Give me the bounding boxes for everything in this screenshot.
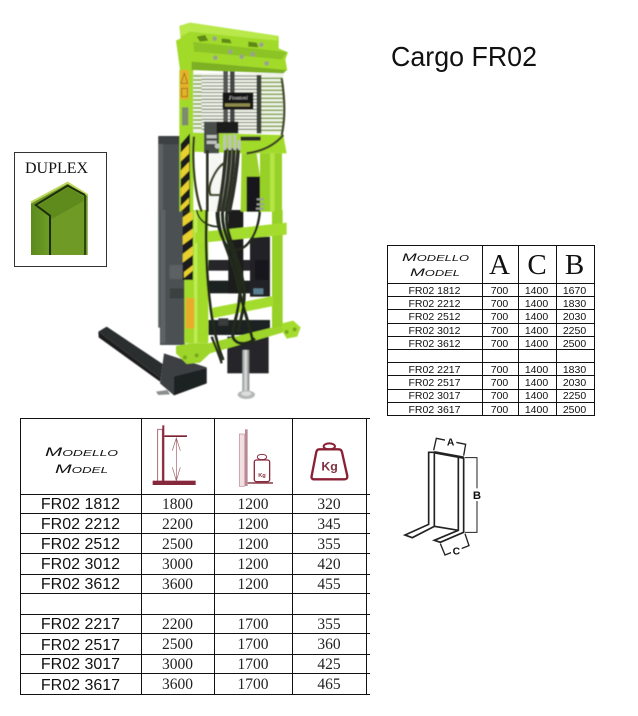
capacities values: 1200	[238, 516, 269, 533]
capacities values: 1200	[238, 576, 269, 593]
capacities model column: FR02 3617	[41, 677, 120, 694]
capacities table header: Model	[55, 462, 108, 476]
dimensions table rows: FR02 2517	[409, 377, 461, 389]
warning sticker lower	[186, 298, 194, 329]
capacities values: 320	[317, 496, 341, 513]
icon: lift height	[153, 425, 196, 485]
upper machine parts	[176, 23, 288, 212]
dimensions table rows: FR02 2217	[409, 364, 461, 376]
capacities values: 1700	[238, 656, 269, 673]
dimensions table rows: 700	[491, 298, 508, 310]
lower green uprights	[260, 153, 282, 212]
dimensions table rows: 700	[491, 404, 508, 416]
duplex label: DUPLEX	[25, 160, 89, 177]
dimensions table header: B	[565, 249, 584, 281]
diagram: fork dimensions A B C: B	[473, 490, 481, 502]
capacities model column: FR02 2512	[41, 536, 120, 553]
capacities model column: FR02 2217	[41, 616, 120, 633]
capacities values: 3600	[162, 676, 193, 693]
dimensions table rows: 2500	[563, 404, 586, 416]
dimension label B	[472, 488, 482, 501]
dimensions table rows: FR02 2512	[409, 311, 461, 323]
icon: weight: Kg	[321, 460, 338, 474]
dark rear mast upper	[158, 136, 182, 328]
dimensions table rows: FR02 3612	[409, 338, 461, 350]
top carriage	[176, 23, 288, 71]
capacities values: 1200	[238, 556, 269, 573]
dimensions table rows: 1400	[525, 377, 548, 389]
capacities table header: Modello	[45, 445, 118, 459]
dimensions table rows: 2030	[563, 377, 586, 389]
dimension label A	[445, 436, 456, 447]
dimensions table header: C	[527, 249, 547, 281]
dimensions table rows: 2250	[563, 325, 586, 337]
illustration: green mast lift	[98, 23, 301, 399]
dimensions table rows: 2250	[563, 390, 586, 402]
icon: load capacity	[239, 429, 273, 486]
dimensions table rows: 1830	[563, 364, 586, 376]
dimensions table rows: 1400	[525, 311, 548, 323]
valve block	[204, 122, 219, 153]
dimensions table rows: FR02 3617	[409, 404, 461, 416]
icon: green channel profile	[31, 183, 88, 255]
capacities values: 3600	[162, 576, 193, 593]
capacities values: 1200	[238, 496, 269, 513]
capacities values: 360	[317, 636, 341, 653]
dimensions table rows: 2500	[563, 338, 586, 350]
capacities values: 3000	[162, 656, 193, 673]
capacities values: 3000	[162, 556, 193, 573]
dimensions table rows: 1400	[525, 338, 548, 350]
hazard stripes lower	[183, 210, 193, 280]
dimensions table rows: 1400	[525, 364, 548, 376]
capacities values: 420	[317, 556, 341, 573]
dimensions table rows: 1400	[525, 298, 548, 310]
capacities model column: FR02 2517	[41, 637, 120, 654]
dimensions table rows: 1830	[563, 298, 586, 310]
jack stand	[242, 350, 249, 392]
capacities model column: FR02 3012	[41, 556, 120, 573]
capacities model column: FR02 3017	[41, 656, 120, 673]
title: Cargo FR02	[391, 41, 537, 72]
dimensions table rows: FR02 2212	[409, 298, 461, 310]
duplex frame	[14, 152, 106, 266]
capacities values: 2500	[162, 536, 193, 553]
wire guard	[193, 73, 283, 133]
dimensions table rows: 1400	[525, 390, 548, 402]
dimensions table rows: 2030	[563, 311, 586, 323]
capacities values: 1700	[238, 616, 269, 633]
orange warning stickers	[180, 70, 189, 99]
dimensions table header	[402, 249, 584, 281]
dimensions table rows: 700	[491, 364, 508, 376]
dimensions table rows: 1400	[525, 285, 548, 297]
capacities values	[162, 496, 341, 693]
diagram: fork dimensions A B C: C	[453, 546, 461, 557]
fork	[98, 327, 163, 378]
capacities values: 2200	[162, 516, 193, 533]
capacities values: 355	[317, 536, 341, 553]
panel: duplex profile	[14, 152, 106, 266]
capacities values: 345	[317, 516, 341, 533]
panel brand text: Frontoni	[228, 95, 248, 101]
table: dimensions A C B	[387, 245, 594, 416]
capacities values: 1700	[238, 636, 269, 653]
dimensions table rows: 1670	[563, 285, 586, 297]
capacities values: 2200	[162, 616, 193, 633]
dimensions table header: A	[489, 249, 510, 281]
capacities table header	[45, 445, 118, 476]
icon: load capacity: Kg	[258, 473, 266, 479]
hoses lower	[197, 210, 260, 363]
capacities values: 465	[317, 676, 341, 693]
capacities values: 1800	[162, 496, 193, 513]
dimensions table header: Model	[410, 267, 460, 279]
capacities values: 1700	[238, 676, 269, 693]
grey plate	[182, 107, 188, 125]
dimensions table rows: 700	[491, 377, 508, 389]
black control panel	[223, 93, 253, 109]
dimensions table rows: 700	[491, 325, 508, 337]
capacities model column	[41, 496, 120, 694]
dimensions table rows: 700	[491, 390, 508, 402]
cross bar	[192, 133, 287, 153]
capacities values: 1200	[238, 536, 269, 553]
capacities values: 2500	[162, 636, 193, 653]
lower machine parts	[98, 210, 301, 399]
hazard stripes upper	[181, 133, 190, 212]
dimensions table rows: 700	[491, 285, 508, 297]
dimensions table rows: 700	[491, 311, 508, 323]
diagram: fork dimensions A B C	[405, 436, 482, 557]
black inner carriage	[208, 260, 270, 271]
table: capacities	[20, 418, 370, 694]
capacities model column: FR02 1812	[41, 496, 120, 513]
diagram: fork dimensions A B C: A	[447, 438, 455, 449]
capacities model column: FR02 3612	[41, 576, 120, 593]
dimensions table rows: 1400	[525, 404, 548, 416]
dimensions table rows: FR02 3017	[409, 390, 461, 402]
capacities values: 455	[317, 576, 341, 593]
dimensions table rows: 700	[491, 338, 508, 350]
dimensions table header: Modello	[402, 252, 469, 264]
capacities model column: FR02 2212	[41, 516, 120, 533]
dimension label C	[451, 545, 462, 555]
hoses upper	[218, 148, 238, 212]
capacities values: 425	[317, 656, 341, 673]
dimensions table rows: 1400	[525, 325, 548, 337]
icon: weight	[312, 443, 347, 479]
dimensions table rows: FR02 1812	[409, 285, 461, 297]
left green upright	[179, 70, 193, 212]
carriage base	[160, 353, 207, 395]
dimensions table rows	[409, 285, 586, 416]
warning triangle	[181, 73, 188, 83]
capacities values: 355	[317, 616, 341, 633]
green frame	[184, 210, 208, 343]
dimensions table rows: FR02 3012	[409, 325, 461, 337]
